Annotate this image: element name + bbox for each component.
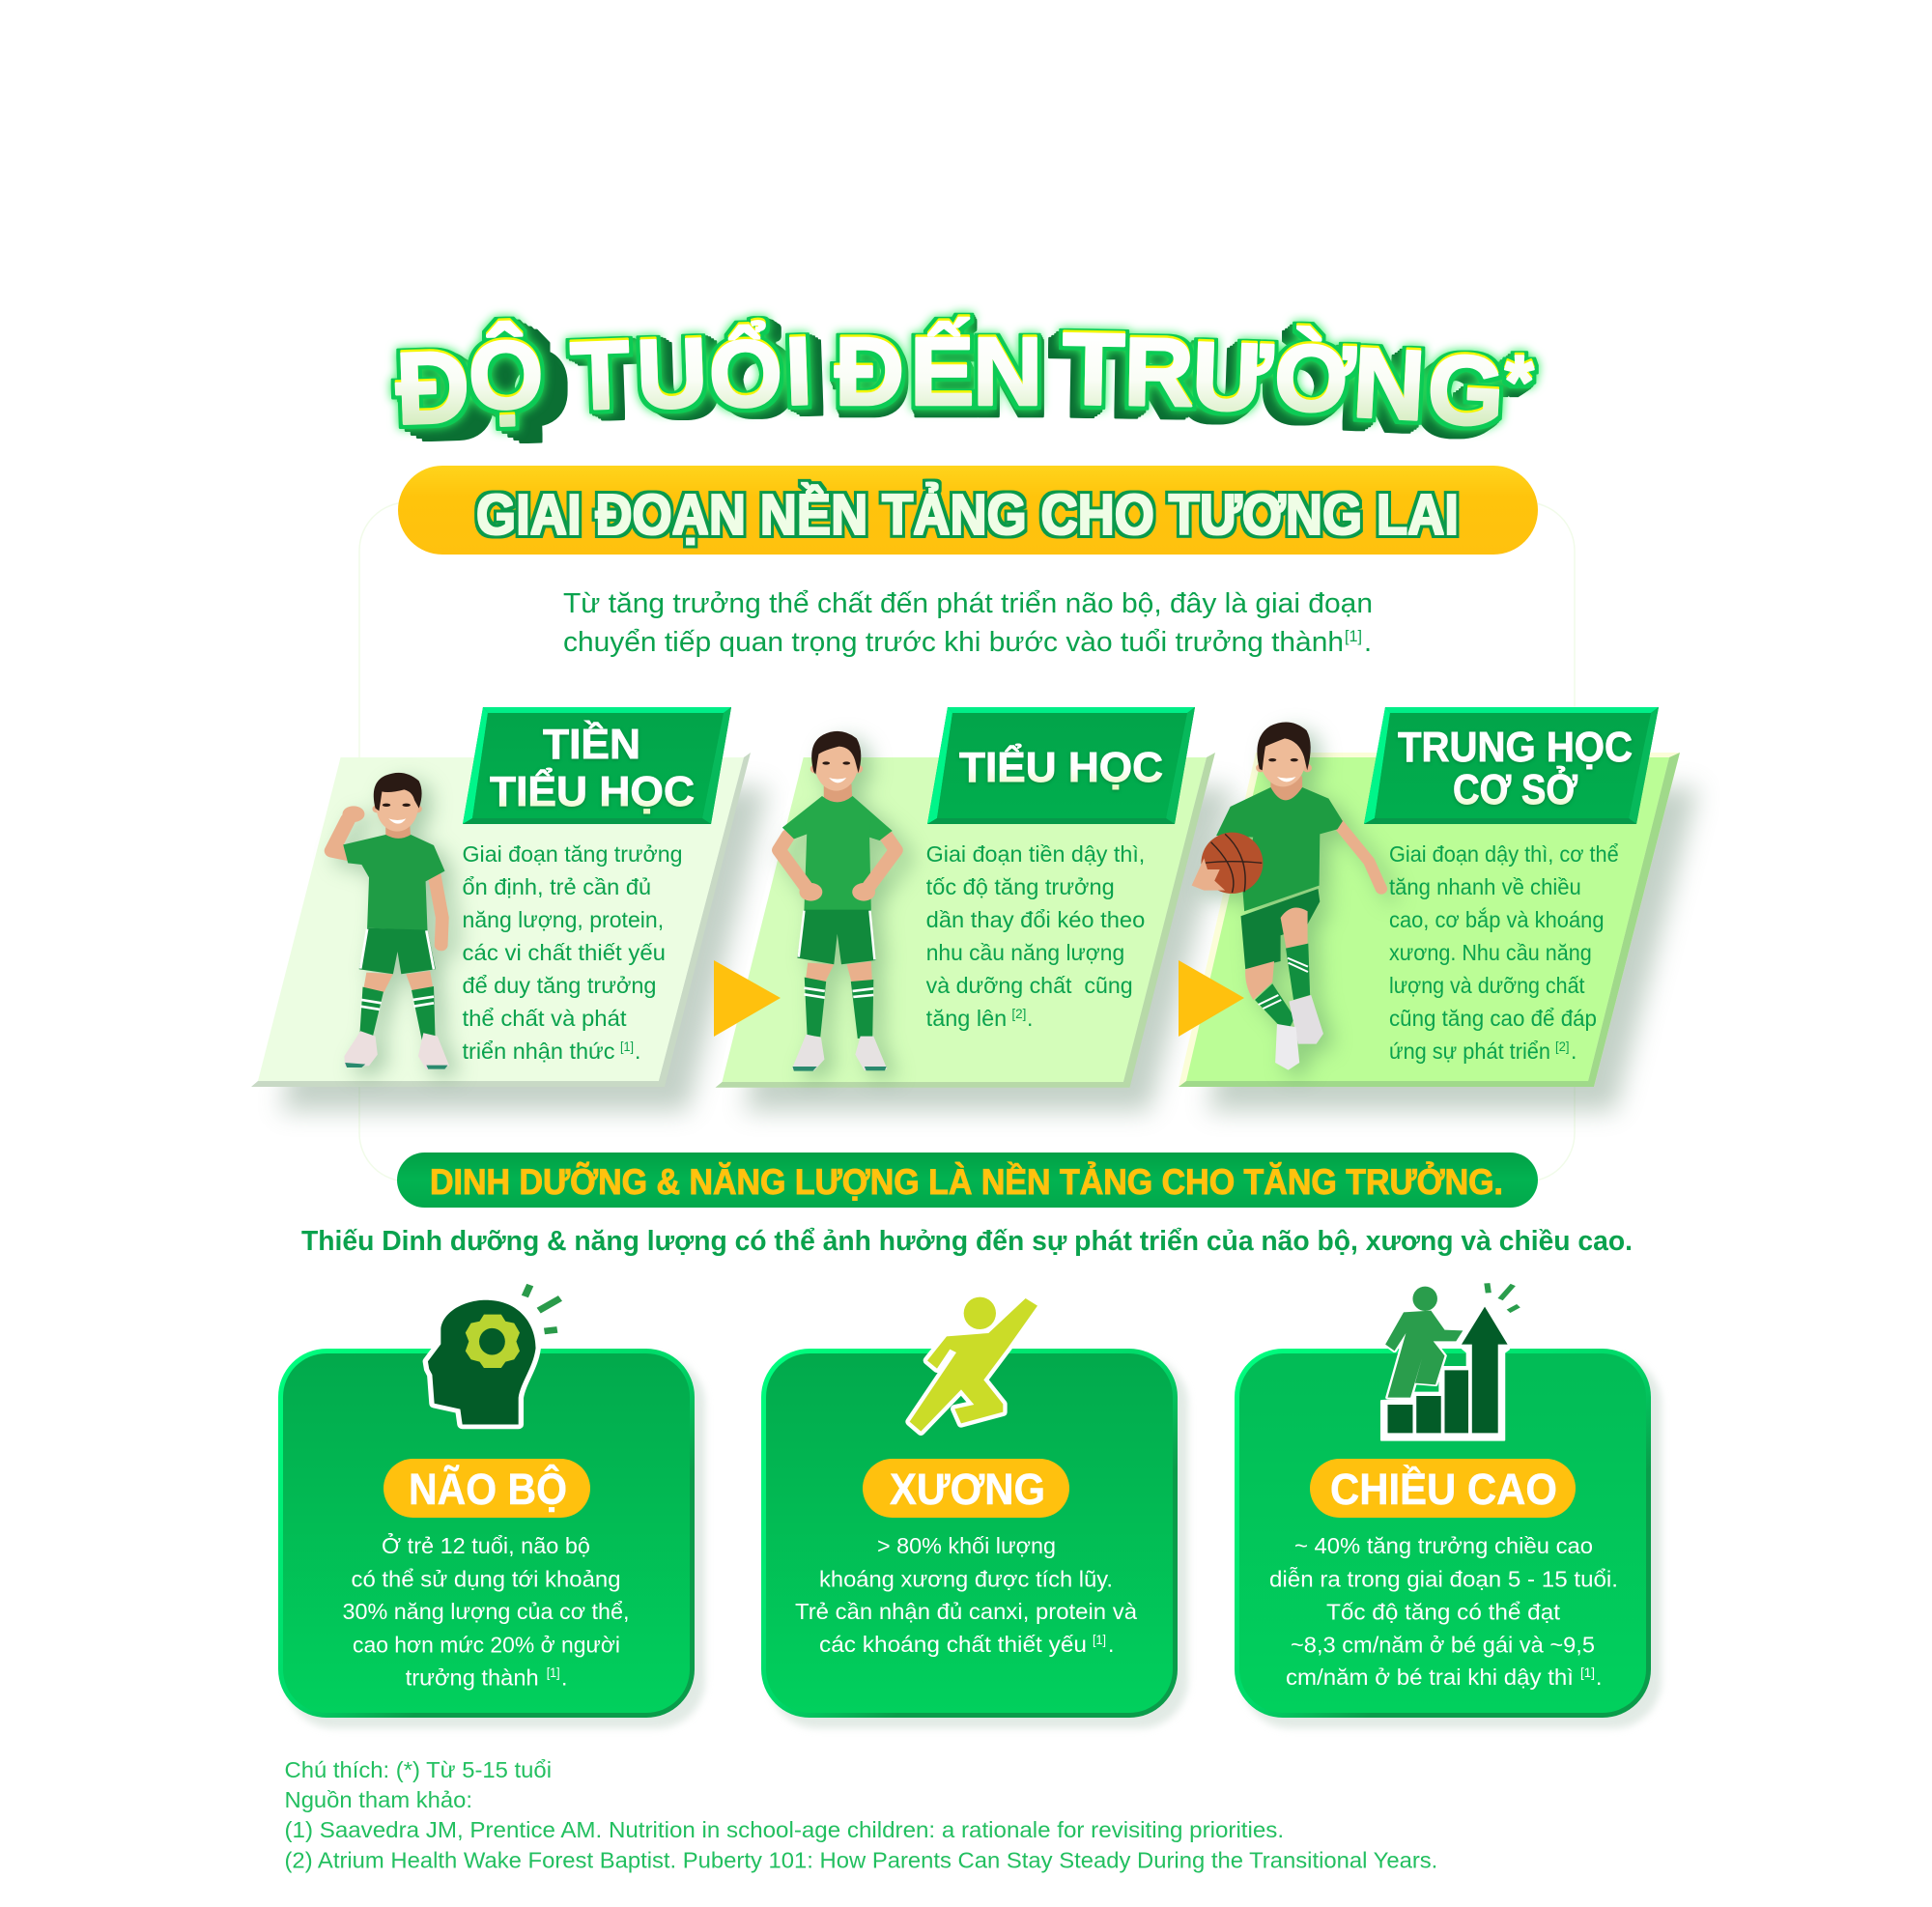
icon: brain — [428, 1285, 560, 1424]
boy 2: hands on hips — [779, 731, 895, 1071]
panel: tiểu học — [715, 753, 1234, 1111]
icon: runner — [910, 1297, 1037, 1432]
text: tiền tiểu học: thể chất và phát — [462, 1006, 627, 1031]
title: T — [1062, 312, 1125, 427]
intro text — [563, 588, 1373, 658]
card text: chiều cao — [1269, 1533, 1618, 1690]
card text: não bộ: cao hơn mức 20% ở người — [353, 1633, 620, 1658]
card: não bộ — [278, 1285, 705, 1728]
title: Đ — [394, 329, 471, 446]
label pill: xương: XƯƠNG — [890, 1465, 1045, 1514]
card text: não bộ: . — [561, 1665, 567, 1691]
intro text: Từ tăng trưởng thể chất đến phát triển não bộ, đây là giai đoạn — [563, 588, 1373, 619]
card text: xương: Trẻ cần nhận đủ canxi, protein và — [795, 1599, 1137, 1624]
card: xương — [761, 1297, 1188, 1728]
text: tiểu học: và dưỡng chất cũng — [926, 973, 1133, 998]
footnotes and sources — [284, 1757, 1437, 1872]
card text: xương: [1] — [1093, 1632, 1106, 1647]
title: Ờ — [1272, 324, 1357, 433]
card text: não bộ: Ở trẻ 12 tuổi, não bộ — [382, 1531, 590, 1558]
text: tiểu học: Giai đoạn tiền dậy thì, — [926, 841, 1145, 867]
title: I — [783, 317, 814, 426]
text: tiền tiểu học: năng lượng, protein, — [462, 907, 664, 932]
text: trung học cơ sở: ứng sự phát triển — [1389, 1039, 1550, 1064]
text: trung học cơ sở: xương. Nhu cầu năng — [1389, 940, 1592, 965]
text: tiểu học: [2] — [1011, 1006, 1026, 1021]
text: trung học cơ sở: [2] — [1555, 1039, 1569, 1054]
card text: xương: các khoáng chất thiết yếu — [819, 1632, 1087, 1657]
footnotes and sources: (1) Saavedra JM, Prentice AM. Nutrition in school-age children: a rationale for revisiting priorities. — [284, 1817, 1284, 1842]
title: Ổ — [707, 319, 784, 428]
text: trung học cơ sở: . — [1571, 1039, 1577, 1064]
text: trung học cơ sở: Giai đoạn dậy thì, cơ thể — [1389, 841, 1619, 867]
card text: não bộ: [1] — [547, 1665, 560, 1680]
text: tiểu học: dần thay đổi kéo theo — [926, 907, 1145, 932]
title: R — [1123, 318, 1195, 427]
title: Ư — [1190, 322, 1274, 433]
title — [394, 312, 1534, 447]
intro text: [1] — [1345, 627, 1362, 645]
card text: chiều cao: [1] — [1580, 1665, 1595, 1680]
text: tiền tiểu học: các vi chất thiết yếu — [462, 940, 666, 965]
text: trung học cơ sở — [1389, 841, 1619, 1064]
panel: tiền tiểu học — [251, 753, 768, 1111]
card text: chiều cao: . — [1596, 1665, 1602, 1690]
tag: tiền tiểu học: TIỀN — [543, 720, 640, 768]
title: G — [1425, 333, 1507, 447]
label pill: não bộ: NÃO BỘ — [409, 1465, 567, 1514]
text: trung học cơ sở: lượng và dưỡng chất — [1389, 973, 1585, 998]
card text: não bộ: có thể sử dụng tới khoảng — [352, 1567, 620, 1592]
nutrition subheading: Thiếu Dinh dưỡng & năng lượng có thể ảnh hưởng đến sự phát triển của não bộ, xương và chiều cao. — [301, 1226, 1633, 1257]
card text: chiều cao: cm/năm ở bé trai khi dậy thì — [1286, 1665, 1574, 1690]
text: tiền tiểu học: để duy tăng trưởng — [462, 973, 657, 998]
text: trung học cơ sở: tăng nhanh về chiều — [1389, 874, 1581, 899]
title: * — [1505, 341, 1534, 423]
card: chiều cao — [1235, 1283, 1662, 1728]
card text: xương: khoáng xương được tích lũy. — [819, 1567, 1113, 1592]
text: tiền tiểu học: triển nhận thức — [462, 1039, 614, 1064]
intro text: . — [1364, 627, 1372, 658]
title: N — [1350, 327, 1428, 441]
nutrition banner: DINH DƯỠNG & NĂNG LƯỢNG LÀ NỀN TẢNG CHO TĂNG TRƯỞNG. — [430, 1161, 1503, 1202]
text: tiền tiểu học: Giai đoạn tăng trưởng — [462, 841, 682, 867]
footnotes and sources: (2) Atrium Health Wake Forest Baptist. Puberty 101: How Parents Can Stay Steady During the Transitional Years. — [284, 1847, 1437, 1872]
card text: não bộ — [342, 1531, 630, 1691]
tag: trung học cơ sở — [1364, 707, 1659, 824]
text: tiểu học: tăng lên — [926, 1006, 1007, 1031]
title: Ộ — [467, 320, 546, 431]
card text: não bộ: 30% năng lượng của cơ thể, — [342, 1599, 630, 1624]
title: Đ — [835, 318, 904, 426]
nutrition banner — [397, 1153, 1538, 1208]
text: tiểu học: . — [1027, 1006, 1033, 1031]
tag: trung học cơ sở: TRUNG HỌC — [1398, 724, 1633, 771]
card text: xương: . — [1108, 1632, 1114, 1657]
arrow: stage 1 to 2 — [714, 960, 781, 1037]
text: trung học cơ sở: cao, cơ bắp và khoáng — [1389, 907, 1604, 932]
label pill: chiều cao: CHIỀU CAO — [1330, 1465, 1557, 1514]
card text: xương — [795, 1533, 1137, 1657]
text: trung học cơ sở: cũng tăng cao để đáp — [1389, 1006, 1597, 1031]
title: U — [635, 317, 709, 430]
title: Ế — [910, 318, 975, 426]
tag: tiền tiểu học — [463, 707, 731, 824]
arrow: stage 2 to 3 — [1179, 960, 1244, 1037]
card text: não bộ: trưởng thành — [406, 1665, 539, 1691]
title: N — [973, 318, 1042, 426]
text: tiểu học: tốc độ tăng trưởng — [926, 874, 1115, 899]
card text: chiều cao: Tốc độ tăng có thể đạt — [1326, 1600, 1561, 1625]
text: tiểu học: nhu cầu năng lượng — [926, 940, 1124, 965]
banner: yellow pill — [398, 466, 1538, 555]
tag: tiểu học — [927, 707, 1195, 824]
text: tiền tiểu học: ổn định, trẻ cần đủ — [462, 874, 651, 899]
label pill: xương — [863, 1459, 1069, 1518]
footnotes and sources: Chú thích: (*) Từ 5-15 tuổi — [284, 1757, 552, 1782]
card text: chiều cao: ~ 40% tăng trưởng chiều cao — [1294, 1533, 1593, 1558]
boy 3: basketball — [1192, 723, 1381, 1070]
intro text: chuyển tiếp quan trọng trước khi bước vào tuổi trưởng thành — [563, 627, 1344, 658]
text: tiền tiểu học: [1] — [620, 1039, 634, 1054]
icon: height growth — [1381, 1283, 1519, 1440]
tag: trung học cơ sở: CƠ SỞ — [1453, 764, 1577, 813]
panel: trung học cơ sở — [1179, 753, 1698, 1111]
card text: chiều cao: ~8,3 cm/năm ở bé gái và ~9,5 — [1291, 1633, 1595, 1658]
tag: tiểu học: TIỂU HỌC — [959, 742, 1163, 791]
footnotes and sources: Nguồn tham khảo: — [284, 1787, 472, 1812]
card text: xương: > 80% khối lượng — [877, 1533, 1056, 1558]
text: tiểu học — [926, 841, 1145, 1031]
tag: tiền tiểu học: TIỂU HỌC — [490, 766, 695, 815]
banner heading: GIAI ĐOẠN NỀN TẢNG CHO TƯƠNG LAI — [476, 482, 1459, 547]
text: tiền tiểu học — [462, 841, 682, 1064]
text: tiền tiểu học: . — [635, 1039, 640, 1064]
boy 1: flexing — [332, 773, 449, 1069]
card text: chiều cao: diễn ra trong giai đoạn 5 - 15 tuổi. — [1269, 1567, 1618, 1592]
title: T — [569, 321, 632, 431]
